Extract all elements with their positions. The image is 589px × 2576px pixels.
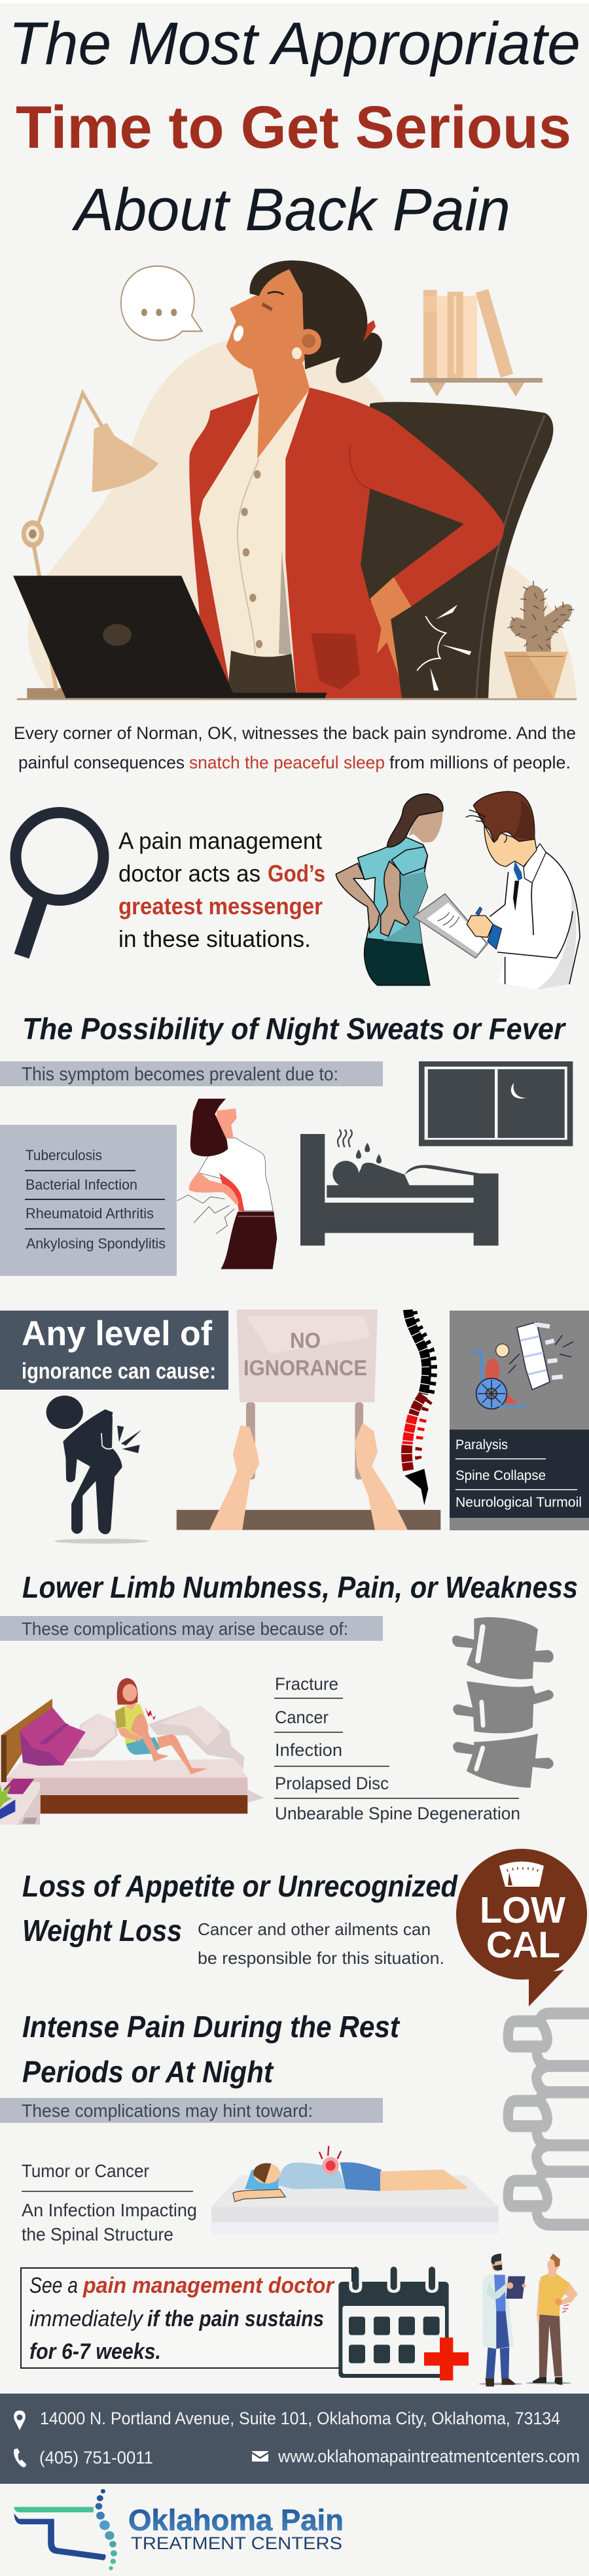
band: complications arise: These complications may arise because of: [22, 1619, 348, 1639]
icon: speech bubble [121, 266, 202, 341]
list: limb causes: Fracture [275, 1674, 338, 1694]
panel: consequences: Paralysis [455, 1437, 508, 1452]
patient figure [526, 2254, 578, 2385]
text block: pain management doctor: in these situations. [118, 925, 311, 952]
illustration: doctor examining patient [336, 791, 580, 989]
callout: see a doctor: for 6-7 weeks. [29, 2339, 161, 2364]
footer contact panel: 14000 N. Portland Avenue, Suite 101, Oklahoma City, Oklahoma, 73134 [40, 2409, 560, 2428]
callout: see a doctor: pain management doctor [82, 2273, 335, 2298]
title: About Back Pain [71, 177, 510, 243]
list: tumor and infection [22, 2161, 197, 2244]
band: any level of ignorance: ignorance can cause: [22, 1359, 216, 1384]
panel: consequences: Spine Collapse [455, 1468, 546, 1483]
icon: wheelchair and injured spine [473, 1322, 573, 1409]
icon: grey spine outline [508, 2014, 589, 2225]
icon: envelope [252, 2451, 268, 2462]
icon: phone [14, 2448, 26, 2467]
footer contact panel [0, 2394, 589, 2484]
heading: night sweats: The Possibility of Night Sweats or Fever [22, 1012, 566, 1046]
list: tumor and infection: the Spinal Structure [22, 2224, 173, 2244]
icon: magnifying glass [16, 812, 103, 956]
title: Time to Get Serious [16, 94, 571, 161]
icon: Oklahoma outline and spine [14, 2489, 117, 2570]
band: any level of ignorance [0, 1311, 228, 1390]
hero illustration: woman with back pain at desk [13, 260, 577, 700]
illustration: protest sign with hands: NO [290, 1328, 321, 1352]
icon: office chair [361, 402, 553, 698]
woman figure [115, 1678, 207, 1774]
illustration: protest sign with hands [177, 1310, 440, 1530]
icon: grey vertebrae [452, 1617, 554, 1788]
panel: consequences [450, 1311, 589, 1530]
callout: see a doctor: See a [29, 2273, 78, 2298]
callout: see a doctor: if the pain sustains [147, 2307, 324, 2331]
intro paragraph: snatch the peaceful sleep [189, 753, 385, 772]
callout: low cal bubble: LOW [480, 1889, 565, 1931]
heading: intense pain: Periods or At Night [22, 2055, 274, 2089]
callout: see a doctor [21, 2268, 352, 2368]
band: complications hint: These complications may hint toward: [22, 2101, 313, 2121]
text block: pain management doctor: God’s [268, 860, 325, 887]
icon: night window [419, 1061, 573, 1146]
icon: location pin [14, 2411, 26, 2430]
icon: spine colored black to red [404, 1310, 433, 1505]
heading: loss of appetite: Weight Loss [22, 1914, 182, 1948]
intro paragraph: painful consequences [18, 753, 185, 772]
panel: causes list [0, 1125, 177, 1276]
heading: loss of appetite: Loss of Appetite or Unrecognized [22, 1869, 458, 1903]
illustration: man lying on mattress [211, 2146, 499, 2234]
list: limb causes: Prolapsed Disc [275, 1774, 389, 1793]
icon: calendar with red cross [338, 2267, 469, 2380]
doctor figure [479, 2254, 526, 2386]
intro paragraph: from millions of people. [389, 753, 571, 772]
callout: low cal bubble [456, 1849, 587, 2006]
panel: causes list: Rheumatoid Arthritis [26, 1205, 154, 1222]
title: The Most Appropriate [9, 10, 580, 77]
list: limb causes [274, 1674, 520, 1823]
heading: loss of appetite [22, 1869, 458, 1948]
illustration: doctor and patient standing [479, 2254, 578, 2386]
footer contact panel: (405) 751-0011 [39, 2448, 153, 2467]
text block: pain management doctor: A pain management [118, 827, 322, 854]
heading: intense pain: Intense Pain During the Rest [22, 2010, 401, 2044]
figure: woman [189, 260, 504, 698]
panel: causes list: Tuberculosis [26, 1147, 102, 1163]
text block: cancer responsible: Cancer and other ailments can [198, 1919, 431, 1939]
icon: bookshelf [410, 289, 543, 396]
logo: TREATMENT CENTERS [131, 2533, 342, 2553]
text block: cancer responsible [198, 1919, 444, 1968]
panel: causes list: Ankylosing Spondylitis [26, 1235, 166, 1252]
doctor [466, 791, 580, 989]
icon: pain marks [417, 605, 471, 691]
patient [336, 794, 443, 986]
text block: cancer responsible: be responsible for this situation. [198, 1948, 444, 1968]
icon: cactus in pot [504, 581, 574, 698]
list: tumor and infection: Tumor or Cancer [22, 2161, 149, 2181]
panel: causes list: Bacterial Infection [26, 1176, 137, 1193]
illustration: woman holding lower back [177, 1099, 277, 1269]
panel: consequences: Neurological Turmoil [455, 1495, 582, 1510]
illustration: sweating person in bed [300, 1129, 499, 1246]
icon: laptop [13, 575, 327, 698]
logo: Oklahoma Pain [128, 2503, 344, 2537]
text block: pain management doctor: doctor acts as [118, 860, 260, 887]
intro paragraph [14, 723, 576, 772]
illustration: protest sign with hands: IGNORANCE [243, 1356, 367, 1380]
band: any level of ignorance: Any level of [22, 1314, 212, 1353]
band: symptom intro: This symptom becomes prevalent due to: [22, 1064, 338, 1085]
callout: see a doctor: immediately [29, 2307, 144, 2331]
text block: pain management doctor [118, 827, 325, 952]
icon: desk lamp [22, 393, 158, 700]
intro paragraph: Every corner of Norman, OK, witnesses the back pain syndrome. And the [14, 723, 576, 743]
title [9, 10, 580, 243]
icon: person with back pain [46, 1396, 149, 1543]
text block: pain management doctor: greatest messenger [118, 893, 323, 919]
callout: low cal bubble: CAL [486, 1924, 560, 1966]
band: complications hint [0, 2098, 383, 2123]
icon: weighing scale [499, 1861, 544, 1887]
list: limb causes: Cancer [275, 1708, 329, 1727]
list: tumor and infection: An Infection Impacting [22, 2200, 197, 2220]
illustration: woman on bed holding knee [0, 1678, 264, 1825]
list: limb causes: Infection [275, 1740, 342, 1760]
list: limb causes: Unbearable Spine Degeneration [275, 1804, 520, 1823]
logo [14, 2489, 344, 2570]
clipboard [414, 894, 488, 958]
heading: intense pain [22, 2010, 401, 2089]
